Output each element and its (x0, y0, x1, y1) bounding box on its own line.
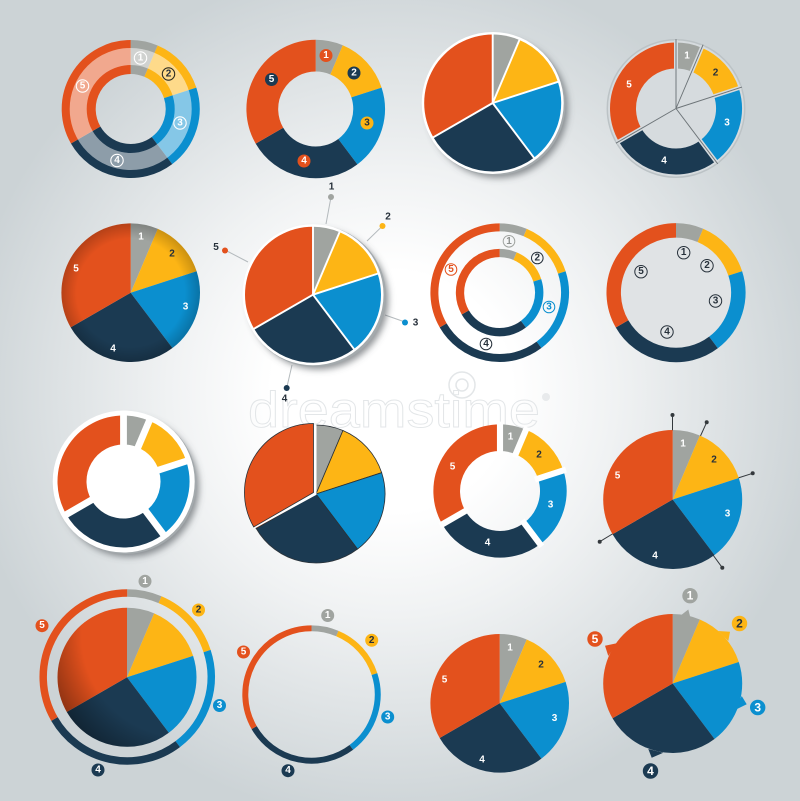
shadow (422, 32, 568, 178)
outlined labels (445, 236, 555, 350)
chart 15: plain pie (430, 634, 569, 773)
chart 3: white-rimmed pie with drop shadow (422, 32, 568, 178)
outlined number labels: 4 (114, 155, 120, 166)
outlined labels: 2 (535, 252, 541, 264)
gaps (63, 412, 189, 537)
outlined labels: 1 (681, 247, 687, 258)
slice separators (253, 225, 379, 350)
gaps (617, 40, 741, 163)
labels: 4 (661, 156, 667, 166)
labels (626, 50, 730, 166)
badge labels: 4 (285, 765, 291, 776)
chart 13: shaded pie inside thin ring (36, 575, 226, 776)
outlined labels: 3 (546, 302, 552, 312)
labels: 3 (183, 302, 189, 312)
labels: 4 (485, 538, 491, 548)
labels (450, 432, 554, 548)
pie slices (58, 608, 197, 747)
labels: 5 (450, 462, 456, 472)
labels: 2 (711, 454, 717, 466)
badge labels (237, 609, 394, 777)
pie slices (247, 425, 385, 563)
badge labels: 3 (754, 700, 761, 714)
labels: 2 (713, 68, 719, 78)
badge labels: 1 (142, 576, 148, 587)
outlined number labels: 1 (138, 52, 144, 64)
pie slices (603, 614, 742, 753)
labels: 2 (538, 660, 544, 670)
pointer spikes (605, 610, 747, 758)
chart 4: ring segments in a disc with spokes (607, 39, 745, 177)
segments (623, 56, 729, 161)
outlined number labels: 5 (80, 80, 86, 92)
outlined labels: 4 (664, 326, 670, 338)
labels: 5 (73, 264, 79, 274)
outer ring (434, 227, 565, 358)
labels (615, 438, 731, 562)
callout dots and numbers: 1 (329, 182, 335, 192)
edge shading (61, 223, 200, 362)
outer ring (43, 593, 211, 761)
outlined labels (635, 246, 722, 338)
shadow (242, 224, 388, 370)
outlined number labels (76, 52, 186, 167)
labels: 3 (548, 500, 554, 510)
outlined labels: 5 (638, 266, 644, 277)
badge labels: 4 (95, 764, 101, 776)
chart 14: thin ring with badges (237, 609, 394, 777)
badge labels: 1 (325, 610, 331, 621)
badge labels: 5 (241, 646, 247, 658)
badge labels: 5 (269, 74, 275, 85)
outlined number labels: 3 (177, 118, 183, 128)
callout dots and numbers: 5 (213, 242, 219, 253)
chart 1: double ring with lighter middle band (76, 52, 186, 167)
badge labels (587, 588, 765, 779)
badge labels: 4 (647, 764, 654, 778)
labels: 1 (508, 432, 514, 442)
outlined labels: 4 (483, 338, 489, 350)
shading (58, 608, 196, 747)
badge labels (36, 575, 226, 776)
ring (245, 628, 378, 761)
labels: 1 (138, 232, 144, 242)
slice separators (432, 33, 559, 159)
offset slice (244, 424, 316, 529)
outlined labels: 1 (506, 236, 512, 247)
watermark: dreamstime (248, 382, 540, 438)
labels: 5 (626, 80, 632, 90)
badge labels: 2 (351, 68, 357, 78)
segments (72, 430, 175, 533)
pie slices (603, 430, 742, 569)
chart 10: outlined pie with offset slice (244, 424, 385, 563)
pie slices (61, 223, 200, 362)
badge labels: 2 (736, 616, 743, 630)
badge labels: 3 (364, 118, 370, 128)
labels: 5 (442, 674, 448, 686)
badge labels: 2 (196, 604, 202, 616)
chart 7: two concentric rings (434, 227, 565, 358)
ring bands (78, 56, 183, 162)
labels: 4 (652, 550, 658, 562)
badge labels: 5 (592, 632, 599, 646)
chart 16: pie with pointer spikes and badges (587, 588, 765, 779)
chart 9: white disc with separated donut and shadow (53, 410, 199, 557)
labels: 3 (552, 713, 558, 724)
badge labels: 2 (369, 635, 375, 646)
badge labels: 1 (323, 50, 329, 61)
outlined labels: 2 (704, 260, 710, 271)
segments (447, 438, 553, 544)
chart 2: donut with badge labels (262, 49, 374, 168)
badge labels: 4 (301, 156, 307, 166)
pie slices (430, 634, 569, 773)
pie slices (245, 227, 381, 363)
labels: 3 (724, 118, 730, 128)
labels: 2 (536, 450, 542, 460)
pins (598, 413, 755, 570)
labels: 2 (169, 248, 175, 260)
badge labels: 3 (385, 712, 391, 722)
spokes (616, 39, 742, 164)
gaps (440, 422, 566, 546)
callout dots and numbers: 4 (282, 394, 288, 404)
labels (442, 642, 558, 766)
labels: 4 (110, 344, 116, 354)
labels: 4 (479, 754, 485, 766)
labels: 5 (615, 470, 621, 482)
outlined labels: 5 (448, 264, 454, 275)
outlined number labels: 2 (166, 68, 172, 80)
disc (616, 233, 736, 353)
chart 6: pie with shadow and callout dots (213, 182, 419, 404)
pie slices (424, 34, 561, 171)
callout dots and numbers: 2 (385, 212, 391, 222)
callout dots and numbers: 3 (413, 318, 419, 328)
labels (73, 232, 189, 354)
badge labels: 1 (687, 589, 694, 603)
donut ring (262, 56, 369, 162)
badge labels (265, 49, 374, 168)
inner ring (460, 253, 539, 332)
chart 8: thick ring on a grey disc (614, 230, 738, 355)
labels: 3 (725, 508, 731, 520)
labels: 1 (684, 50, 690, 62)
badge labels: 3 (217, 700, 223, 711)
labels: 1 (680, 438, 686, 450)
shadow (53, 410, 199, 557)
badge labels: 5 (39, 620, 45, 631)
callout lines (225, 197, 405, 388)
disc (607, 40, 745, 177)
outlined labels: 3 (713, 296, 719, 306)
chart 11: exploded donut (440, 422, 566, 548)
chart 12: pie with pin markers (598, 413, 755, 570)
callout dots and numbers (213, 182, 419, 404)
ring (614, 230, 738, 355)
labels: 1 (507, 642, 513, 654)
chart 5: pie with inner edge shading (61, 223, 200, 362)
